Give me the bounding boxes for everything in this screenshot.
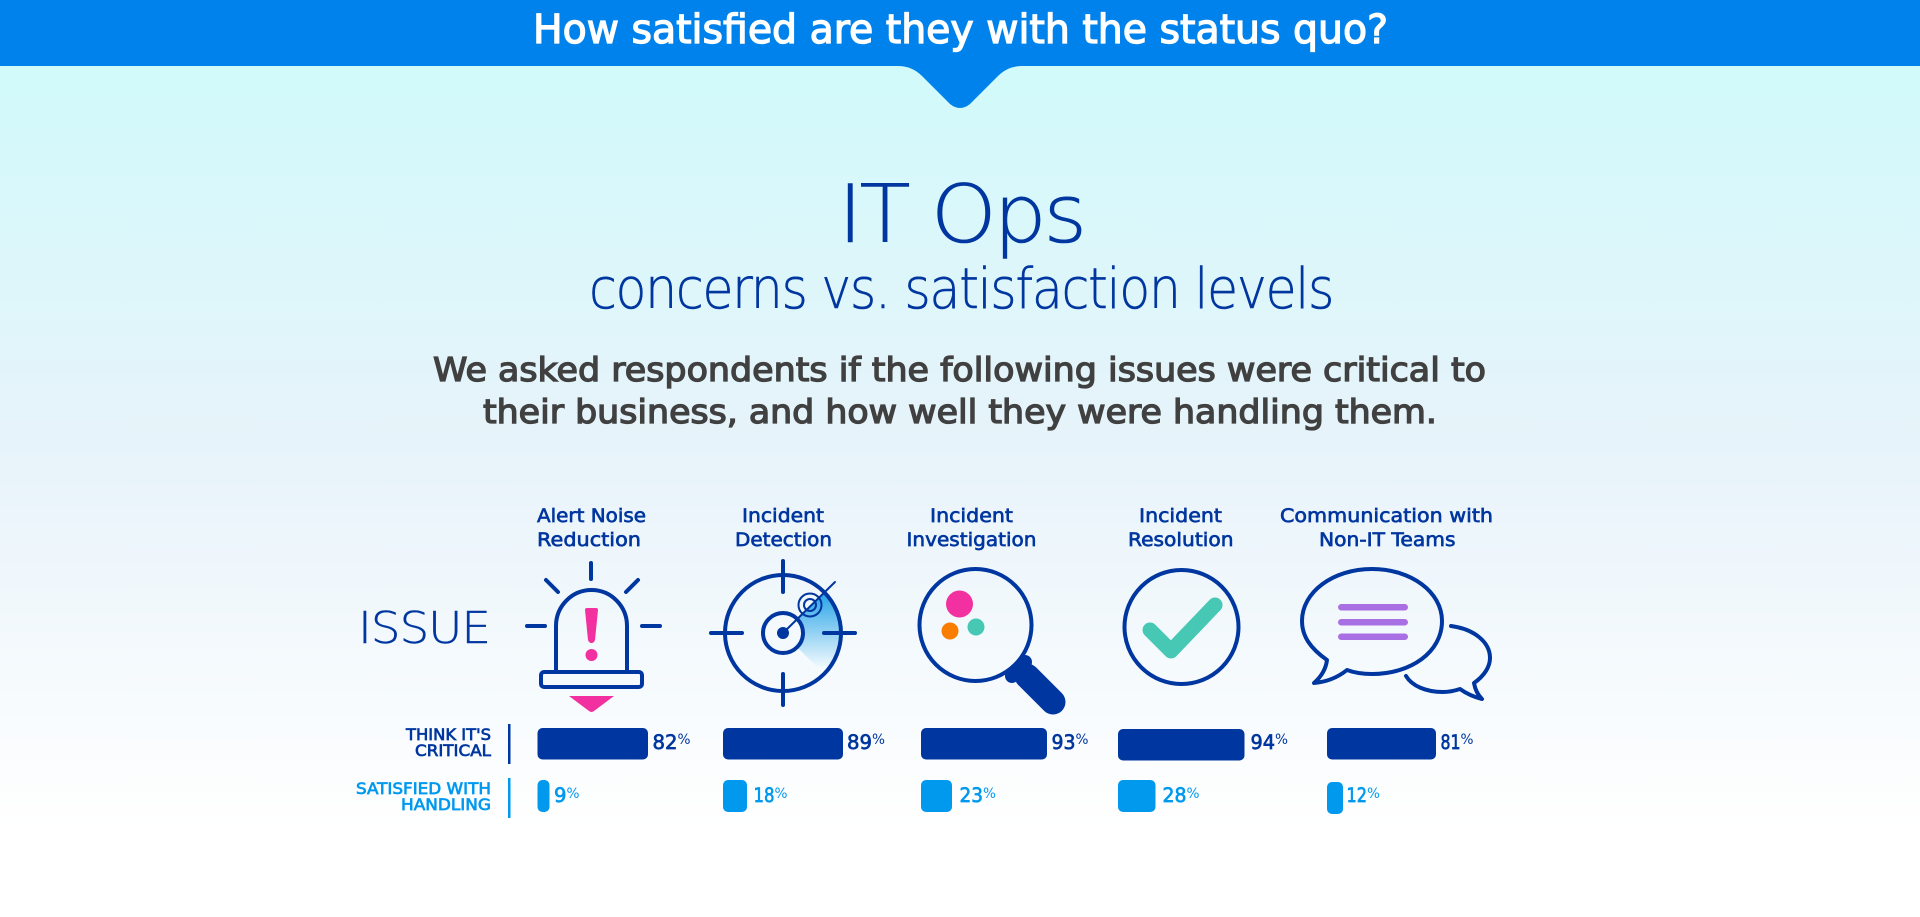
heading: incident investigation bbox=[906, 505, 1036, 551]
column: incident detection bbox=[711, 505, 885, 812]
column: communication with non-it teams bbox=[1280, 505, 1493, 814]
heading: communication with non-it teams: Non-IT Teams bbox=[1319, 529, 1456, 551]
column: incident resolution bbox=[1118, 505, 1288, 812]
bar: satisfied 18% bbox=[723, 780, 788, 812]
heading: incident detection: Detection bbox=[735, 529, 832, 551]
icon: radar target bbox=[711, 561, 855, 705]
bar: satisfied 12%: % bbox=[1367, 786, 1380, 802]
bar: critical 93% bbox=[921, 728, 1088, 760]
bar: critical 94%: 94 bbox=[1250, 731, 1275, 754]
title bbox=[589, 168, 1333, 322]
heading: alert noise reduction bbox=[537, 505, 646, 551]
column: incident investigation bbox=[906, 505, 1088, 812]
bar: satisfied 23% bbox=[921, 780, 996, 812]
bar: satisfied 9%: % bbox=[566, 786, 580, 802]
heading: alert noise reduction: Alert Noise bbox=[537, 505, 646, 527]
column: alert noise reduction bbox=[527, 505, 690, 812]
bar: satisfied 28% bbox=[1118, 780, 1200, 812]
row label: satisfied with handling bbox=[356, 778, 510, 818]
title: concerns vs. satisfaction levels bbox=[589, 257, 1333, 322]
bar: critical 89%: 89 bbox=[847, 731, 872, 754]
bar: critical 94% bbox=[1118, 729, 1288, 760]
bar: satisfied 12%: 12 bbox=[1346, 784, 1367, 807]
bar: satisfied 28%: 28 bbox=[1162, 784, 1186, 807]
row label: think it's critical bbox=[405, 724, 510, 764]
intro text: their business, and how well they were handling them. bbox=[483, 392, 1437, 431]
bar: satisfied 9% bbox=[538, 780, 580, 812]
row label: satisfied with handling: HANDLING bbox=[401, 795, 491, 814]
heading: alert noise reduction: Reduction bbox=[537, 529, 641, 551]
header banner bbox=[0, 0, 1920, 108]
icon: speech bubbles bbox=[1302, 569, 1490, 699]
bar: satisfied 18%: 18 bbox=[754, 784, 774, 807]
bar: satisfied 18%: % bbox=[774, 786, 788, 802]
bar: critical 81%: % bbox=[1460, 732, 1474, 748]
title: IT Ops bbox=[838, 168, 1084, 261]
bar: satisfied 23%: 23 bbox=[960, 784, 983, 807]
bar: satisfied 23%: % bbox=[983, 786, 996, 802]
icon: magnifying glass bbox=[920, 569, 1053, 702]
heading: incident investigation: Investigation bbox=[906, 529, 1036, 551]
bar: satisfied 9%: 9 bbox=[554, 784, 566, 807]
intro text bbox=[433, 350, 1486, 431]
bar: critical 81%: 81 bbox=[1440, 731, 1460, 754]
intro text: We asked respondents if the following issues were critical to bbox=[433, 350, 1486, 389]
bar: critical 82% bbox=[538, 728, 690, 760]
heading: incident detection bbox=[735, 505, 832, 551]
heading: communication with non-it teams bbox=[1280, 505, 1493, 551]
icon: check mark bbox=[1124, 570, 1238, 684]
heading: incident investigation: Incident bbox=[930, 505, 1013, 527]
bar: critical 94%: % bbox=[1275, 732, 1288, 748]
bar: critical 82%: % bbox=[678, 732, 690, 748]
bar: satisfied 12% bbox=[1327, 782, 1380, 814]
row label: think it's critical: THINK IT'S bbox=[405, 725, 491, 744]
bar: critical 89% bbox=[723, 728, 885, 760]
bar: critical 89%: % bbox=[872, 732, 885, 748]
heading: communication with non-it teams: Communication with bbox=[1280, 505, 1493, 527]
heading: incident resolution: Resolution bbox=[1128, 529, 1234, 551]
heading: incident detection: Incident bbox=[742, 505, 824, 527]
row label: issue: ISSUE bbox=[358, 603, 490, 654]
bar: critical 93%: 93 bbox=[1052, 731, 1076, 754]
bar: satisfied 28%: % bbox=[1186, 786, 1200, 802]
header banner: How satisfied are they with the status quo? bbox=[533, 7, 1388, 53]
row label: think it's critical: CRITICAL bbox=[415, 741, 491, 760]
bar: critical 81% bbox=[1327, 728, 1474, 760]
icon: alarm siren bbox=[527, 563, 660, 712]
bar: critical 93%: % bbox=[1076, 732, 1088, 748]
heading: incident resolution: Incident bbox=[1139, 505, 1222, 527]
heading: incident resolution bbox=[1128, 505, 1234, 551]
row label: satisfied with handling: SATISFIED WITH bbox=[356, 779, 491, 798]
bar: critical 82%: 82 bbox=[652, 731, 678, 754]
